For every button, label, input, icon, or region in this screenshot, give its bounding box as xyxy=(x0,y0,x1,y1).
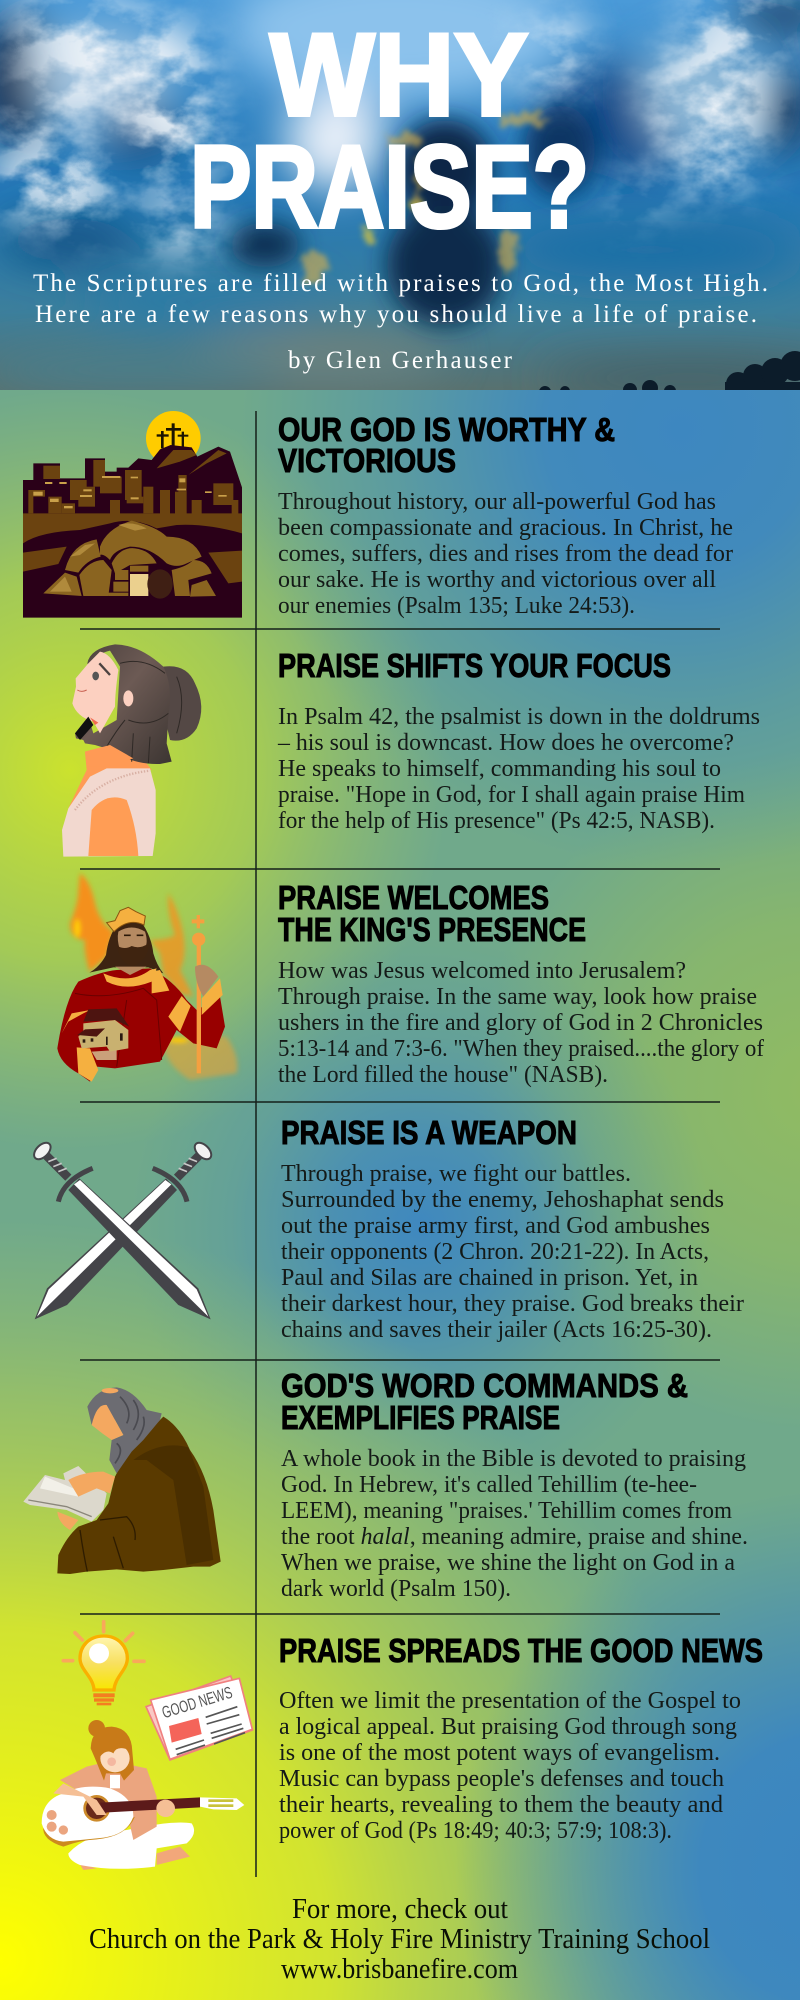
icon: good news newspaper: GOOD NEWS xyxy=(160,1683,235,1722)
section 2 text: In Psalm 42, the psalmist is down in the doldrums xyxy=(278,704,760,730)
section 2 text: praise. "Hope in God, for I shall again praise Him xyxy=(278,782,745,808)
section 4 text: out the praise army first, and God ambushes xyxy=(281,1213,710,1239)
section 4 text: Paul and Silas are chained in prison. Yet, in xyxy=(281,1265,698,1291)
section 6 text: their hearts, revealing to them the beauty and xyxy=(279,1792,723,1818)
section 4 heading: PRAISE IS A WEAPON xyxy=(281,1114,577,1151)
section 1 text: been compassionate and gracious. In Christ, he xyxy=(278,515,733,541)
section 4 text: Surrounded by the enemy, Jehoshaphat sends xyxy=(281,1187,724,1213)
vertical divider and section rules xyxy=(80,411,720,1877)
header: sky photo xyxy=(0,0,800,398)
section 4 text: their darkest hour, they praise. God breaks their xyxy=(281,1291,744,1317)
section 3 heading xyxy=(278,879,586,948)
section 6 text: is one of the most potent ways of evangelism. xyxy=(279,1740,720,1766)
icon: girl looking up xyxy=(62,644,201,857)
title: PRAISE? xyxy=(190,121,589,252)
footer: For more, check out xyxy=(292,1893,508,1925)
section 3 text: the Lord filled the house" (NASB). xyxy=(278,1062,608,1088)
intro text xyxy=(33,270,768,328)
intro text: The Scriptures are filled with praises to God, the Most High. xyxy=(33,270,768,297)
section 3 heading: THE KING'S PRESENCE xyxy=(278,911,586,948)
icon: monk reading a book xyxy=(23,1387,221,1574)
section 3 text: How was Jesus welcomed into Jerusalem? xyxy=(278,958,686,984)
section 6 text: power of God (Ps 18:49; 40:3; 57:9; 108:3). xyxy=(279,1818,672,1844)
section 4 text xyxy=(281,1161,744,1343)
section 6 text xyxy=(279,1688,741,1844)
icon: king with fire, crown and temple xyxy=(57,873,237,1082)
section 4 text: Through praise, we fight our battles. xyxy=(281,1161,631,1187)
section 5 text: the root halal, meaning admire, praise and shine. xyxy=(281,1524,748,1550)
icon: tomb and city with crosses xyxy=(23,411,242,618)
icon: crossed swords xyxy=(31,1140,214,1319)
section 5 text: God. In Hebrew, it's called Tehillim (te-hee- xyxy=(281,1472,697,1498)
section 5 text xyxy=(281,1446,748,1602)
section 1 heading xyxy=(278,411,615,479)
section 2 text: He speaks to himself, commanding his soul to xyxy=(278,756,721,782)
trees silhouette xyxy=(539,351,800,390)
section 2 text: – his soul is downcast. How does he overcome? xyxy=(277,730,734,756)
section 3 text xyxy=(278,958,764,1088)
section 2 heading: PRAISE SHIFTS YOUR FOCUS xyxy=(278,647,671,684)
section 5 text: dark world (Psalm 150). xyxy=(281,1576,511,1602)
section 1 text: comes, suffers, dies and rises from the dead for xyxy=(278,541,733,567)
section 3 heading: PRAISE WELCOMES xyxy=(278,879,549,916)
icon: girl playing guitar xyxy=(42,1720,244,1870)
section 1 heading: VICTORIOUS xyxy=(278,442,456,479)
footer: www.brisbanefire.com xyxy=(281,1953,518,1985)
section 5 text: LEEM), meaning "praises.' Tehillim comes from xyxy=(281,1498,732,1524)
intro text: Here are a few reasons why you should live a life of praise. xyxy=(35,301,757,328)
section 4 text: their opponents (2 Chron. 20:21-22). In Acts, xyxy=(281,1239,709,1265)
section 3 text: 5:13-14 and 7:3-6. "When they praised....the glory of xyxy=(278,1036,764,1062)
section 1 text: our enemies (Psalm 135; Luke 24:53). xyxy=(278,593,635,619)
section 2 text xyxy=(277,704,760,834)
section 6 text: Music can bypass people's defenses and touch xyxy=(279,1766,724,1792)
section 5 heading xyxy=(281,1367,688,1436)
icon: light bulb xyxy=(63,1622,144,1705)
section 3 text: ushers in the fire and glory of God in 2 Chronicles xyxy=(278,1010,763,1036)
section 1 heading: OUR GOD IS WORTHY & xyxy=(278,411,615,448)
section 5 heading: EXEMPLIFIES PRAISE xyxy=(281,1399,560,1436)
footer: Church on the Park & Holy Fire Ministry Training School xyxy=(89,1923,710,1955)
title: WHY xyxy=(270,9,528,140)
byline: by Glen Gerhauser xyxy=(288,347,513,374)
section 1 text: Throughout history, our all-powerful God has xyxy=(278,489,716,515)
section 2 text: for the help of His presence" (Ps 42:5, NASB). xyxy=(278,808,715,834)
icon: good news newspaper xyxy=(146,1676,252,1760)
footer xyxy=(89,1893,710,1985)
section 6 text: Often we limit the presentation of the Gospel to xyxy=(279,1688,741,1714)
section 5 heading: GOD'S WORD COMMANDS & xyxy=(281,1367,688,1404)
title xyxy=(190,9,589,252)
section 4 text: chains and saves their jailer (Acts 16:25-30). xyxy=(281,1317,712,1343)
section 5 text: When we praise, we shine the light on God in a xyxy=(281,1550,735,1576)
section 3 text: Through praise. In the same way, look how praise xyxy=(278,984,757,1010)
section 1 text xyxy=(278,489,733,619)
section 5 text: A whole book in the Bible is devoted to praising xyxy=(281,1446,746,1472)
section 1 text: our sake. He is worthy and victorious over all xyxy=(278,567,716,593)
section 6 text: a logical appeal. But praising God through song xyxy=(279,1714,737,1740)
